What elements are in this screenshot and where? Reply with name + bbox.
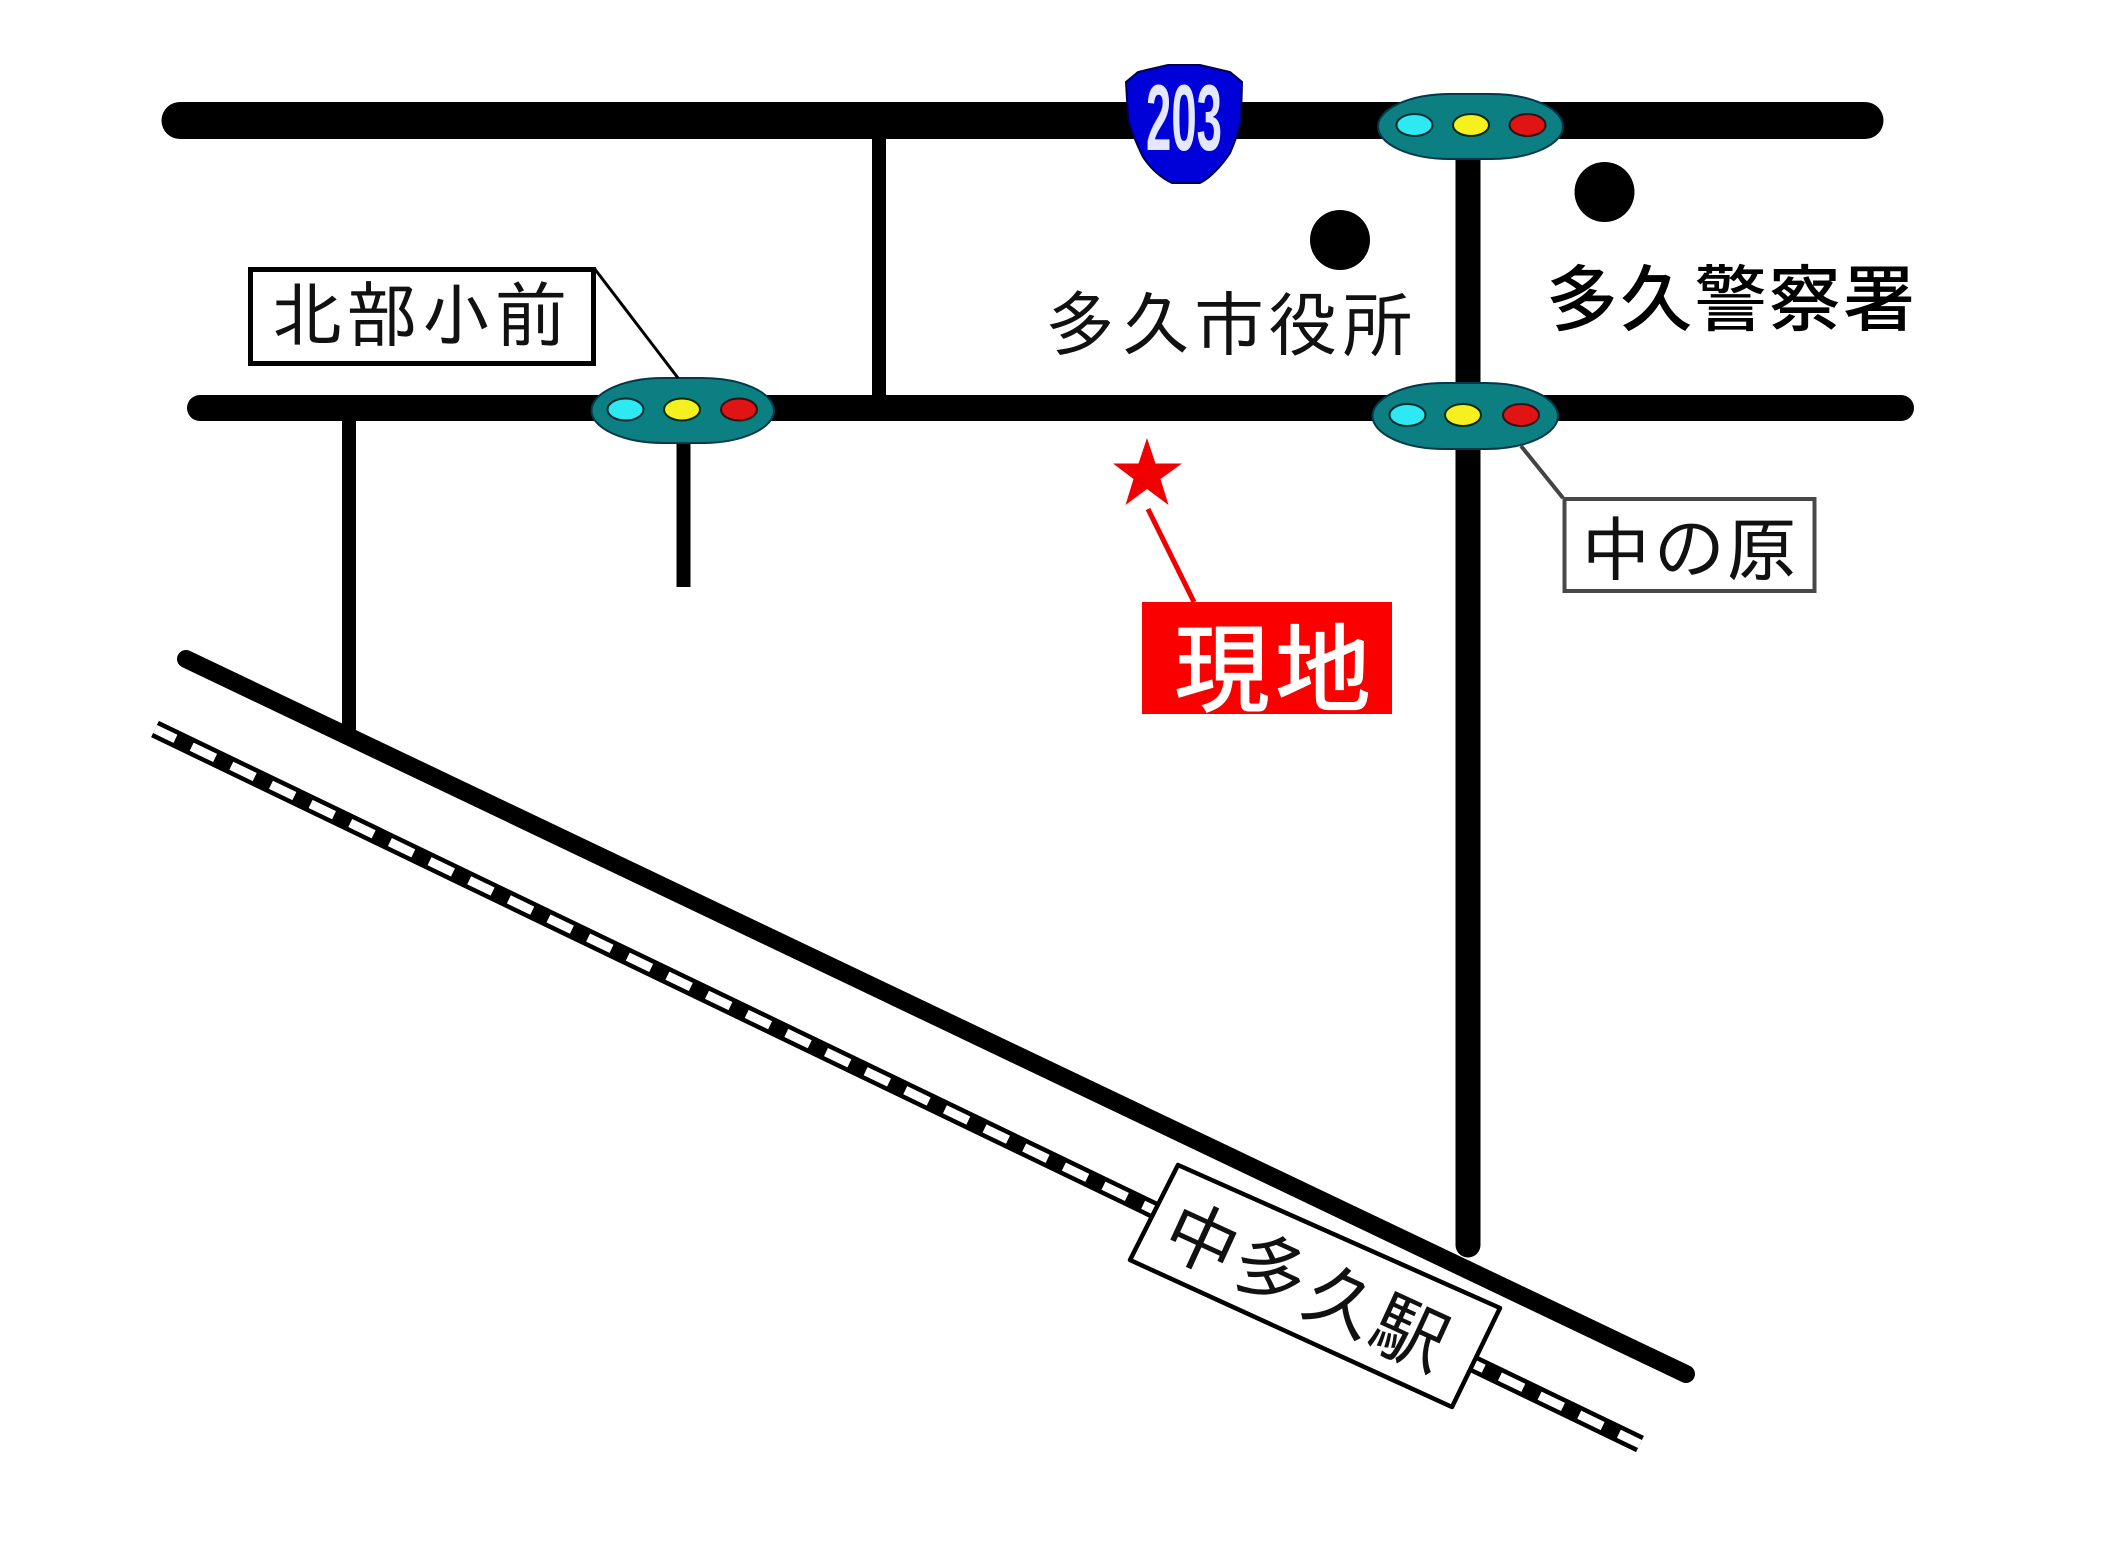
icon: traffic light at Hokubu-sho-mae — [592, 378, 774, 443]
callout: Hokubu-sho-mae intersection — [250, 268, 678, 378]
icon: route 203 shield — [1126, 65, 1242, 183]
road: north-south main street — [1456, 126, 1480, 1245]
callout: Naka-Saku station label: 中多久駅 — [1149, 1186, 1461, 1390]
icon: traffic light at Naka-no-hara — [1372, 383, 1558, 449]
icon: route 203 shield: 203 — [1146, 65, 1222, 170]
icon: police station location dot — [1574, 162, 1634, 222]
road: street south of Hokubu-sho-mae — [676, 410, 690, 587]
callout: Naka-no-hara intersection: 中の原 — [1580, 511, 1798, 591]
callout: site label: 現地 — [1174, 618, 1376, 725]
road: connecting street between main roads — [872, 120, 886, 408]
label: Saku city hall: 多久市役所 — [1045, 286, 1413, 366]
railway line — [155, 729, 1640, 1444]
road: second east-west street — [200, 395, 1901, 421]
icon: traffic light at route 203 — [1378, 94, 1563, 159]
road: diagonal road along the railway — [186, 659, 1686, 1374]
road: west side street — [342, 408, 356, 735]
callout: Hokubu-sho-mae intersection: 北部小前 — [272, 277, 567, 357]
label: Saku police station: 多久警察署 — [1546, 261, 1915, 341]
icon: city hall location dot — [1310, 210, 1370, 270]
arrow: leader line from site label to star — [1148, 509, 1194, 602]
icon: site star marker — [1113, 438, 1182, 505]
callout: Naka-no-hara intersection — [1521, 446, 1814, 591]
road: route 203 — [180, 102, 1865, 139]
